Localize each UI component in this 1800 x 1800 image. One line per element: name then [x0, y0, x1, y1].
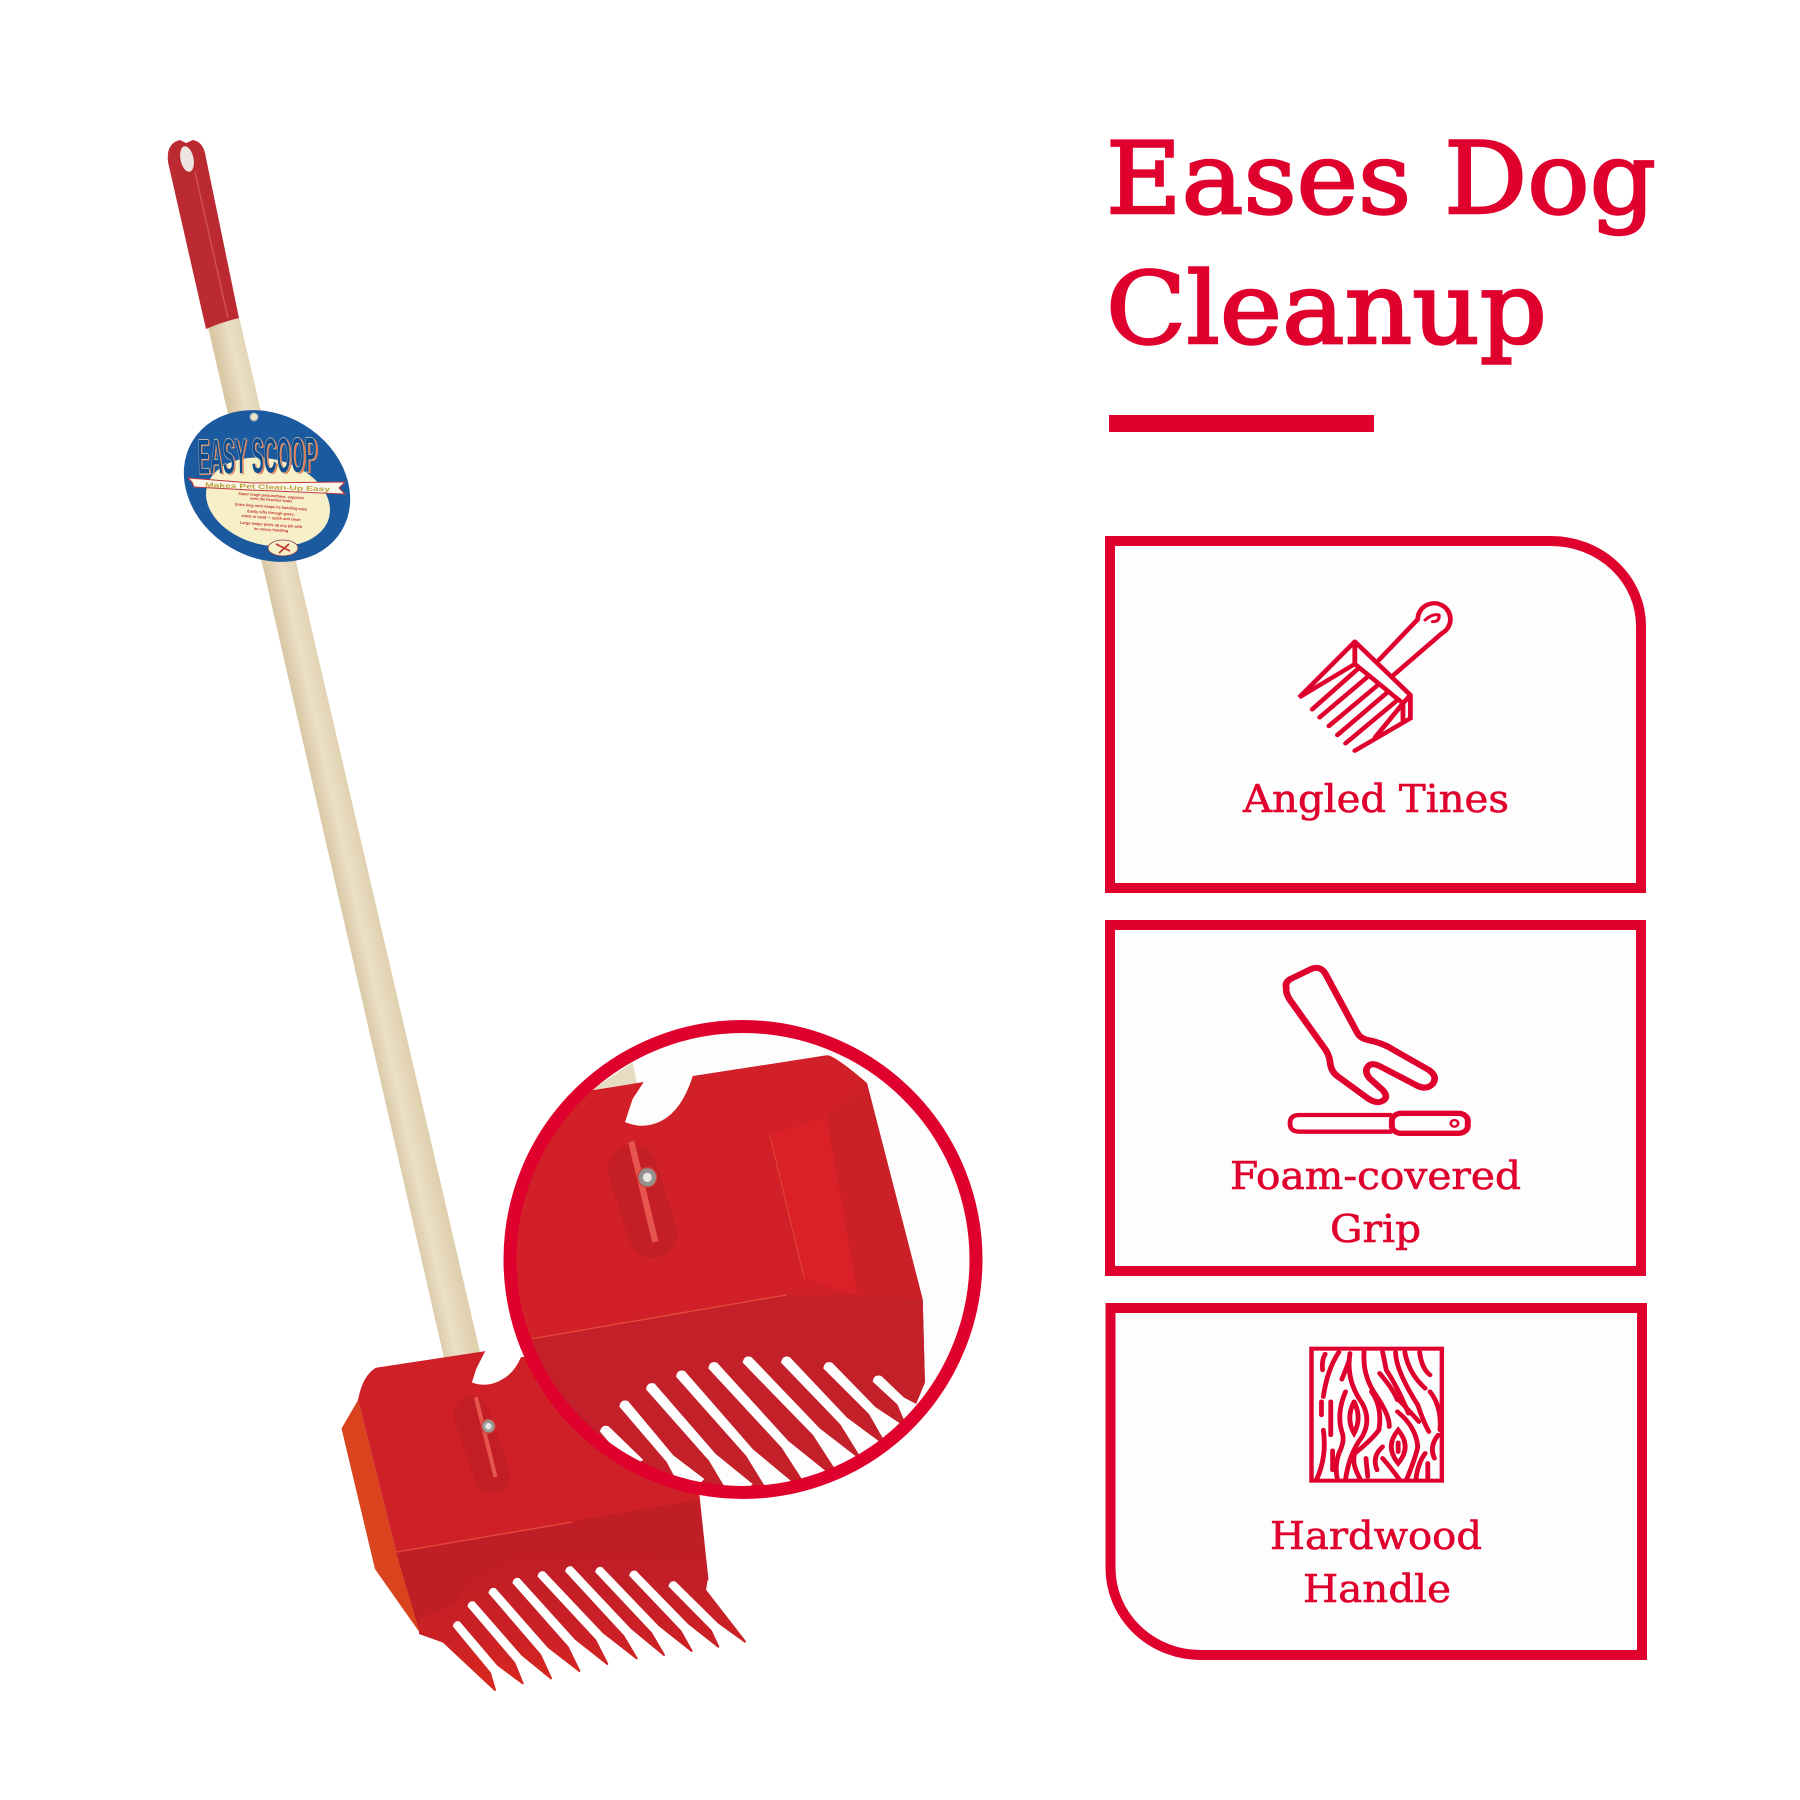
scoop head with tines: [342, 1350, 745, 1690]
foam grip: [168, 140, 239, 329]
hang tag: Easy Scoop: Large tempo picks up any job with: [240, 521, 303, 529]
hang tag: Easy Scoop: stone or sand — quick and clean: [241, 514, 301, 522]
title: Cleanup: [1106, 252, 1547, 367]
hang tag: Easy Scoop: [156, 380, 378, 592]
panel: hardwood handle: [1110, 1308, 1642, 1655]
label: Foam-covered Grip: [1230, 1154, 1521, 1251]
hang tag: Easy Scoop: EASY SCOOP: [197, 427, 317, 485]
label: Hardwood Handle: Handle: [1303, 1567, 1451, 1611]
icon: angled tines scoop: [1299, 603, 1450, 751]
label: Hardwood Handle: [1270, 1514, 1482, 1611]
label: Angled Tines: Angled Tines: [1242, 777, 1509, 821]
hang tag: Easy Scoop: EASY SCOOP: [198, 428, 319, 486]
label: Foam-covered Grip: Foam-covered: [1230, 1154, 1521, 1198]
product: scoop with handle: [156, 140, 745, 1690]
title: [1106, 122, 1656, 367]
hang tag: Easy Scoop: Extra long neck keeps its handling ease: [235, 502, 307, 512]
panel: angled tines: [1110, 541, 1641, 888]
title underline: [1109, 415, 1374, 432]
hang tag: Easy Scoop: even the heaviest loads: [250, 497, 292, 503]
icon: hand above grip: [1286, 968, 1468, 1133]
title: Eases Dog: [1106, 122, 1656, 237]
icon: wood grain: [1311, 1349, 1442, 1481]
panel: foam-covered grip: [1110, 925, 1641, 1271]
hang tag: Easy Scoop: Super tough polyurethane, supports: [238, 492, 304, 500]
hang tag: Easy Scoop: Makes Pet Clean-Up Easy: [205, 482, 331, 493]
label: Foam-covered Grip: Grip: [1330, 1207, 1421, 1251]
hang tag: Easy Scoop: no messy handling: [254, 527, 289, 533]
wooden handle: [208, 317, 480, 1358]
zoom lens: scoop close-up: [479, 1026, 976, 1516]
label: Hardwood Handle: Hardwood: [1270, 1514, 1482, 1558]
hang tag: Easy Scoop: Easily sifts through grass,: [247, 509, 295, 517]
